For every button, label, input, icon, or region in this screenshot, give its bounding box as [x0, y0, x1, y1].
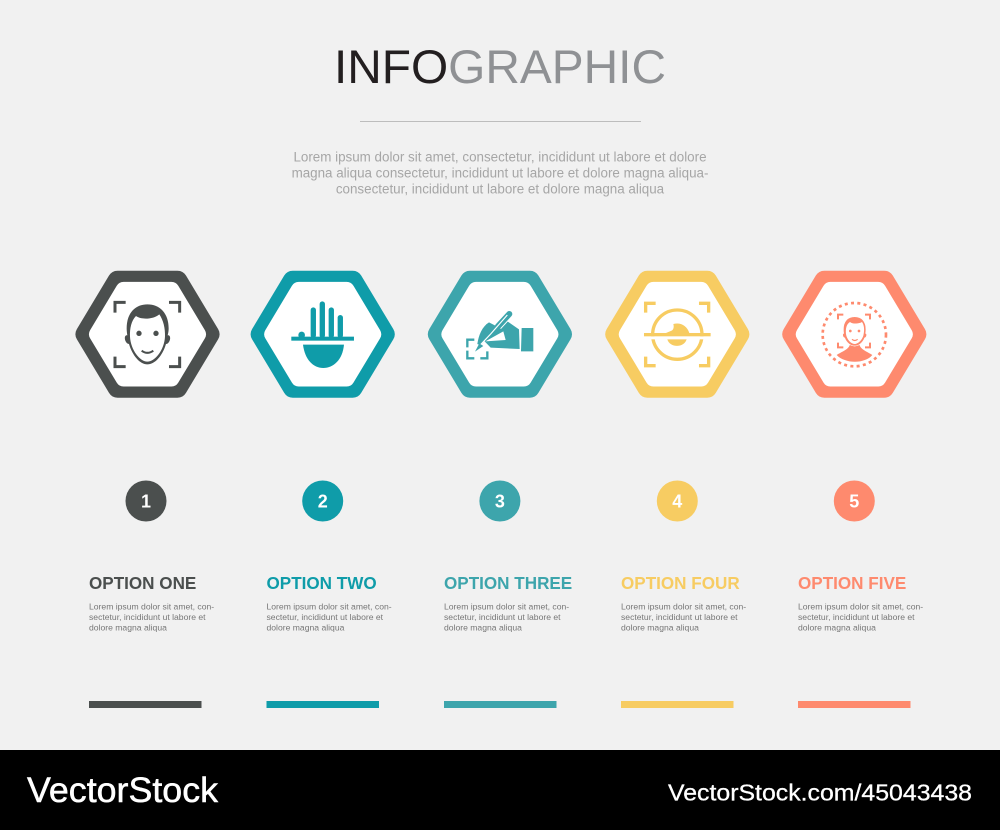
- icon: hand signing: [467, 313, 533, 358]
- number 2: [302, 480, 343, 522]
- description 3: [444, 602, 569, 632]
- panel: option four: [615, 281, 746, 708]
- number 4: 4: [672, 492, 682, 512]
- description 5: Lorem ipsum dolor sit amet, con-: [798, 602, 923, 612]
- description 1: [89, 602, 214, 632]
- number 3: [479, 480, 520, 522]
- intro text: Lorem ipsum dolor sit amet, consectetur, incididunt ut labore et dolore: [293, 150, 707, 164]
- hexagon badge 2: [261, 281, 385, 388]
- description 3: dolore magna aliqua: [444, 622, 522, 632]
- description 4: Lorem ipsum dolor sit amet, con-: [621, 602, 746, 612]
- intro text: [292, 150, 708, 196]
- bar 1: [89, 701, 202, 708]
- description 2: sectetur, incididunt ut labore et: [266, 612, 384, 622]
- description 5: [798, 602, 923, 632]
- bar 2: [266, 701, 379, 708]
- number 5: [834, 480, 875, 522]
- description 1: sectetur, incididunt ut labore et: [89, 612, 206, 622]
- bar 5: [798, 701, 910, 708]
- number 2: 2: [318, 492, 328, 512]
- hexagon badge 3: [438, 281, 562, 388]
- panel: option one: [86, 281, 214, 708]
- number 4: [657, 480, 698, 522]
- heading: option three: OPTION THREE: [444, 574, 572, 593]
- intro text: consectetur, incididunt ut labore et dolore magna aliqua: [336, 182, 665, 196]
- footer url: VectorStock.com/45043438: [668, 780, 972, 806]
- icon: portrait scan: [823, 303, 886, 366]
- panel: option three: [438, 281, 572, 708]
- hexagon badge 1: [86, 281, 210, 388]
- intro text: magna aliqua consectetur, incididunt ut labore et dolore magna aliqua-: [292, 166, 708, 180]
- hexagon badge 5: [792, 281, 916, 388]
- description 3: sectetur, incididunt ut labore et: [444, 612, 561, 622]
- description 4: sectetur, incididunt ut labore et: [621, 612, 738, 622]
- description 4: [621, 602, 746, 632]
- description 2: dolore magna aliqua: [266, 622, 345, 632]
- description 1: dolore magna aliqua: [89, 622, 167, 632]
- icon: eye scan: [644, 303, 711, 366]
- description 5: dolore magna aliqua: [798, 622, 876, 632]
- footer brand: VectorStock: [27, 771, 219, 810]
- heading: option two: OPTION TWO: [266, 574, 377, 593]
- number 3: 3: [495, 492, 505, 512]
- description 2: Lorem ipsum dolor sit amet, con-: [266, 602, 392, 612]
- hexagon badge 4: [615, 281, 739, 388]
- description 4: dolore magna aliqua: [621, 622, 699, 632]
- icon: hand scan: [291, 301, 354, 368]
- description 1: Lorem ipsum dolor sit amet, con-: [89, 602, 214, 612]
- heading: option four: OPTION FOUR: [621, 574, 740, 593]
- bar 3: [444, 701, 556, 708]
- panel: option two: [261, 281, 392, 708]
- description 5: sectetur, incididunt ut labore et: [798, 612, 915, 622]
- description 3: Lorem ipsum dolor sit amet, con-: [444, 602, 569, 612]
- bar 4: [621, 701, 734, 708]
- number 1: 1: [141, 492, 151, 512]
- panel: option five: [792, 281, 923, 708]
- heading: option five: OPTION FIVE: [798, 574, 906, 593]
- number 5: 5: [849, 492, 859, 512]
- heading: option one: OPTION ONE: [89, 574, 196, 593]
- footer band: [0, 750, 1000, 830]
- number 1: [126, 480, 166, 522]
- title: INFOGRAPHIC: [334, 41, 666, 94]
- description 2: [266, 602, 392, 632]
- icon: face scan: [115, 302, 180, 367]
